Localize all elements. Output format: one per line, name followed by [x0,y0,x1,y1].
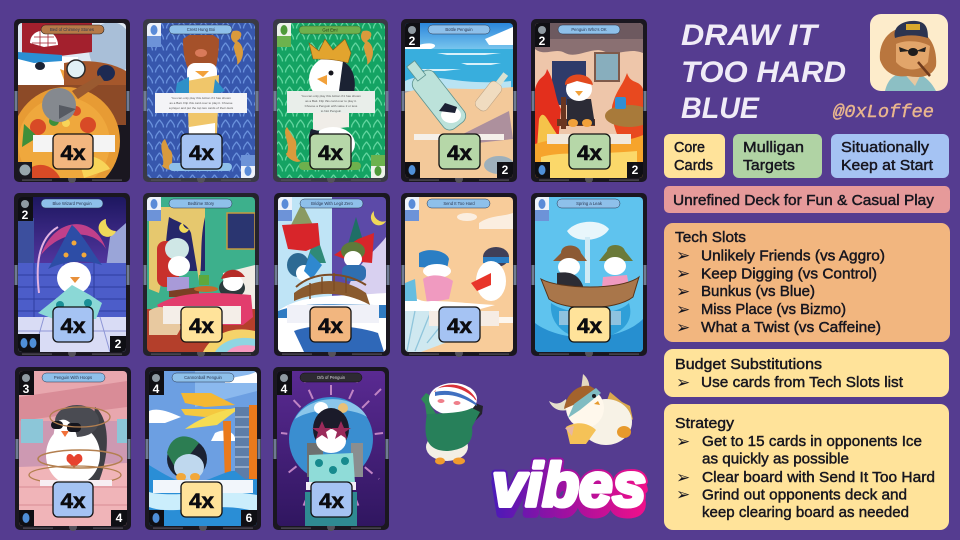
panel: tech slots: ➢ [676,318,690,338]
legend: core cards: Core [674,139,705,156]
card: bear hat penguin, blue bait 4x [143,19,259,183]
legend: mulligan targets: Mulligan [743,139,804,156]
logo: vibes: vibes [492,451,646,519]
card: cannonball penguin, core 4x yellow: 6 [246,511,253,525]
panel: tech slots: Tech Slots [675,229,746,246]
card: crowned penguin, mulligan 4x green: Get Em! [322,28,338,32]
card art: crowned penguin: Choose a Penguin with value 2 or less [305,104,358,108]
sticker: green sweater penguin [421,383,483,464]
card: orb of penguin, situational 4x blue: Orb of Penguin [317,375,346,380]
card: bedtime story, core 4x yellow [143,193,259,357]
panel: tech slots: ➢ [676,246,690,266]
badge: 4x [53,134,93,169]
card: cannonball penguin, core 4x yellow [145,367,261,531]
panel: strategy: Get to 15 cards in opponents Ice [702,433,922,450]
card: bottle penguin, mulligan 4x green: Bottle Penguin [445,27,473,32]
title: BLUE [681,92,760,125]
panel: strategy: ➢ [676,485,690,505]
icon: author avatar [870,14,948,91]
card: blue wizard penguin, 4x blue: 2 [115,337,122,351]
panel: budget substitutions [664,349,949,397]
badge: 4x [310,307,351,342]
legend: situationally keep at start [831,134,949,178]
panel: budget substitutions: Budget Substitutions [675,356,822,373]
badge: 4x: 4x [577,315,602,338]
card: bear hat penguin, blue bait 4x: Crest Hung Boi [187,27,215,32]
card: fire penguin, mulligan 4x green [531,19,653,183]
card art: bottle on beach [400,23,514,178]
card: bedtime story, core 4x yellow: Bedtime Story [188,201,215,206]
legend: situationally keep at start: Keep at Start [841,157,934,174]
title [681,19,846,125]
card: penguin with hoops, situational 4x blue [15,367,131,531]
badge: 4x: 4x [447,142,472,165]
panel: tech slots: Unlikely Friends (vs Aggro) [701,248,885,264]
badge: 4x: 4x [318,315,343,338]
panel: strategy: ➢ [676,468,690,488]
card: bridge penguins, tech 4x orange [274,193,390,357]
badge: 4x [53,482,93,517]
card: penguin with hoops, situational 4x blue: 3 [23,382,30,396]
card: fire penguin, mulligan 4x green: Penguin Who's OK [571,27,607,32]
panel: tech slots: What a Twist (vs Caffeine) [701,319,881,336]
panel: tech slots: Bunkus (vs Blue) [701,283,815,300]
sticker: viking penguin [549,374,633,445]
author handle: @0xLoffee [833,103,934,123]
panel: strategy [664,404,949,530]
card: orb of penguin, situational 4x blue: 4 [281,382,288,396]
badge: 4x [181,482,222,517]
badge: 4x [181,134,222,169]
badge: 4x [310,134,351,169]
legend: mulligan targets: Targets [743,157,795,174]
badge: 4x: 4x [60,490,86,513]
card art: bear hat penguin: You can only play this Action if it has shown [171,96,231,100]
card art: penguin in burning room [535,23,653,179]
badge: 4x: 4x [577,142,602,165]
badge: 4x [439,307,480,342]
card: fire penguin, mulligan 4x green: 2 [539,34,546,48]
badge: 4x [181,307,222,342]
badge: 4x: 4x [189,142,214,165]
card art: bear hat penguin [147,23,255,178]
panel: tech slots: ➢ [676,264,690,284]
title: DRAW IT [681,19,820,52]
banner: unrefined deck note: Unrefined Deck for Fun & Casual Play [673,192,935,209]
card: spring a leak, core 4x yellow: Spring a Leak [576,201,603,206]
badge: 4x: 4x [319,490,344,513]
card art: two penguins on a bridge [278,197,386,352]
card: bridge penguins, tech 4x orange: Bridge With Legit Zero [311,201,353,206]
panel: strategy: as quickly as possible [702,450,849,468]
legend: mulligan targets [733,134,822,178]
badge: 4x: 4x [189,315,214,338]
card: penguin with hoops, situational 4x blue: 4 [116,511,123,525]
card art: crowned penguin: to Not Penguin [321,109,342,113]
badge: 4x: 4x [60,315,86,338]
panel: budget substitutions: ➢ [676,373,690,393]
panel: strategy: Clear board with Send It Too Hard [702,469,935,486]
card art: penguin with hula hoops [19,371,127,526]
panel: tech slots: ➢ [676,282,690,302]
card: spring a leak, core 4x yellow [531,193,647,357]
banner: unrefined deck note [664,186,950,213]
badge: 4x: 4x [60,142,86,165]
card art: bedroom scene [147,197,255,352]
card art: penguin with pizza [18,23,126,178]
badge: 4x [439,134,480,169]
badge: 4x: 4x [189,490,214,513]
card art: crowned penguin: as a Bait. Flip this card over to play it. [305,99,357,103]
panel: tech slots: ➢ [676,300,690,320]
legend: core cards: Cards [674,157,713,174]
badge: 4x: 4x [447,315,472,338]
card: send it too hard, situational 4x blue [401,193,517,357]
card: bottle penguin, mulligan 4x green [400,19,517,183]
badge: 4x [569,307,610,342]
badge: 4x: 4x [318,142,343,165]
card: pizza penguin, core 4x orange: Bed of Chimney Stones [50,27,94,32]
panel: strategy: ➢ [676,432,690,452]
panel: tech slots [664,223,950,342]
panel: tech slots: Keep Digging (vs Control) [701,266,877,282]
card: penguin with hoops, situational 4x blue: Penguin With Hoops [54,375,92,380]
card: bottle penguin, mulligan 4x green: 2 [502,163,509,177]
card art: bear hat penguin: as a Bait. Flip this card over to play it. Choose [170,101,233,105]
card: send it too hard, situational 4x blue: Send It Too Hard [443,201,475,206]
legend: core cards [664,134,725,178]
legend: situationally keep at start: Situationally [841,139,930,156]
panel: strategy: Strategy [675,415,735,432]
panel: budget substitutions: Use cards from Tech Slots list [701,374,904,391]
panel: tech slots: Miss Place (vs Bizmo) [701,301,846,318]
card: cannonball penguin, core 4x yellow: Cannonball Penguin [184,375,223,380]
card art: penguin in glowing orb [277,371,385,526]
card art: waterslide splash [149,371,257,526]
panel: strategy: Grind out opponents deck and [702,486,907,504]
card: pizza penguin, core 4x orange [14,19,130,183]
badge: 4x [569,134,610,169]
card art: crowned penguin: You can only play this Action if it has shown [301,94,361,98]
card: blue wizard penguin, 4x blue: 2 [22,208,29,222]
card art: penguins in leaking boat [535,197,643,352]
card: bottle penguin, mulligan 4x green: 2 [409,34,416,48]
logo: vibes: vibes [492,451,646,519]
badge: 4x [311,482,352,517]
card: crowned penguin, mulligan 4x green [273,19,388,183]
panel: strategy: keep clearing board as needed [702,504,909,521]
badge: 4x [53,307,93,342]
card art: wizard penguin [18,197,126,352]
card: blue wizard penguin, 4x blue [14,193,130,357]
card art: crowned penguin [277,23,385,178]
title: TOO HARD [681,56,846,89]
card: fire penguin, mulligan 4x green: 2 [632,163,639,177]
card: blue wizard penguin, 4x blue: Blue Wizard Penguin [52,201,92,206]
card: cannonball penguin, core 4x yellow: 4 [153,382,160,396]
card art: bear hat penguin: a player and put the top two cards of their deck [169,106,234,110]
card art: penguin pushed off ice [405,197,513,352]
card: orb of penguin, situational 4x blue [273,367,389,531]
logo: vibes: vibes [492,459,646,527]
